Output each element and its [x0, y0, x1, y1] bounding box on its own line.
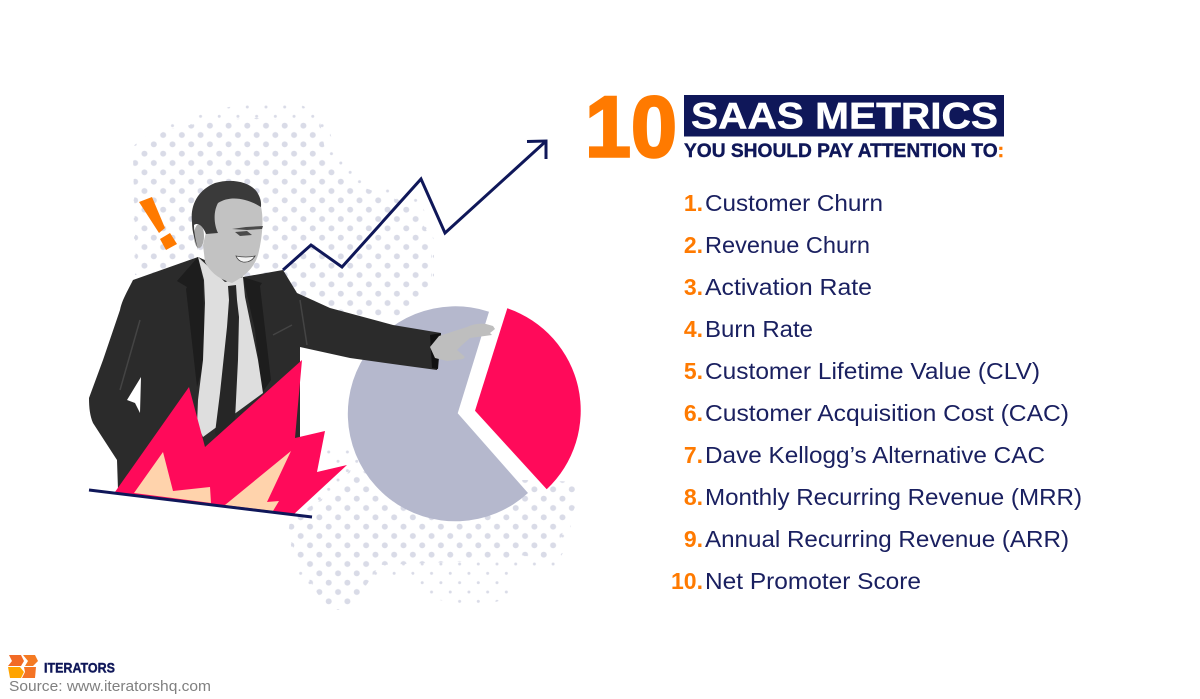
pie chart — [348, 306, 581, 521]
source line: Source: www.iteratorshq.com — [9, 679, 211, 695]
logo wordmark: ITERATORS — [44, 660, 115, 676]
item 3: Activation Rate — [705, 274, 872, 300]
watch and cuff — [430, 333, 441, 369]
item 8: 8. — [684, 484, 703, 510]
logo mark — [8, 655, 38, 678]
item 8: Monthly Recurring Revenue (MRR) — [705, 484, 1082, 510]
flame: outer pink — [115, 360, 347, 515]
heading number 10: 10 — [585, 80, 677, 176]
item 4: Burn Rate — [705, 316, 813, 342]
item 1: 1. — [684, 190, 703, 216]
dotted background: lower — [288, 445, 578, 610]
item 6: Customer Acquisition Cost (CAC) — [705, 400, 1069, 426]
lapels — [177, 257, 271, 393]
jacket folds — [120, 300, 307, 390]
pie slice: pink — [475, 308, 581, 489]
growth arrow — [283, 141, 546, 270]
item 6: 6. — [684, 400, 703, 426]
businessman figure — [89, 181, 495, 490]
item 2: 2. — [684, 232, 703, 258]
subheading: YOU SHOULD PAY ATTENTION TO: — [684, 141, 1004, 162]
shirt — [197, 257, 263, 437]
flame: inner peach right — [225, 451, 291, 511]
dotted background: upper — [132, 100, 434, 320]
tie — [215, 285, 239, 437]
item 10: 10. — [671, 568, 703, 594]
eyebrow and eye — [232, 226, 263, 236]
item 10: Net Promoter Score — [705, 568, 921, 594]
hair — [192, 181, 261, 250]
ear — [194, 224, 204, 248]
item 4: 4. — [684, 316, 703, 342]
item 5: Customer Lifetime Value (CLV) — [705, 358, 1040, 384]
item 1: Customer Churn — [705, 190, 883, 216]
item 5: 5. — [684, 358, 703, 384]
face — [203, 198, 262, 283]
item 7: 7. — [684, 442, 703, 468]
item 9: Annual Recurring Revenue (ARR) — [705, 526, 1069, 552]
item 9: 9. — [684, 526, 703, 552]
smile — [236, 256, 255, 262]
metrics list — [671, 190, 1082, 594]
exclamation mark icon — [139, 197, 177, 250]
item 3: 3. — [684, 274, 703, 300]
flame — [115, 360, 347, 515]
pie slice: grey — [348, 306, 528, 521]
ground line — [89, 490, 312, 517]
jacket — [89, 257, 441, 490]
hand — [430, 324, 495, 361]
heading banner: SAAS METRICS — [691, 96, 998, 136]
item 7: Dave Kellogg’s Alternative CAC — [705, 442, 1045, 468]
iterators logo — [8, 655, 115, 678]
item 2: Revenue Churn — [705, 232, 870, 258]
gap between arm and body — [127, 377, 141, 413]
flame: inner peach left — [134, 452, 211, 503]
